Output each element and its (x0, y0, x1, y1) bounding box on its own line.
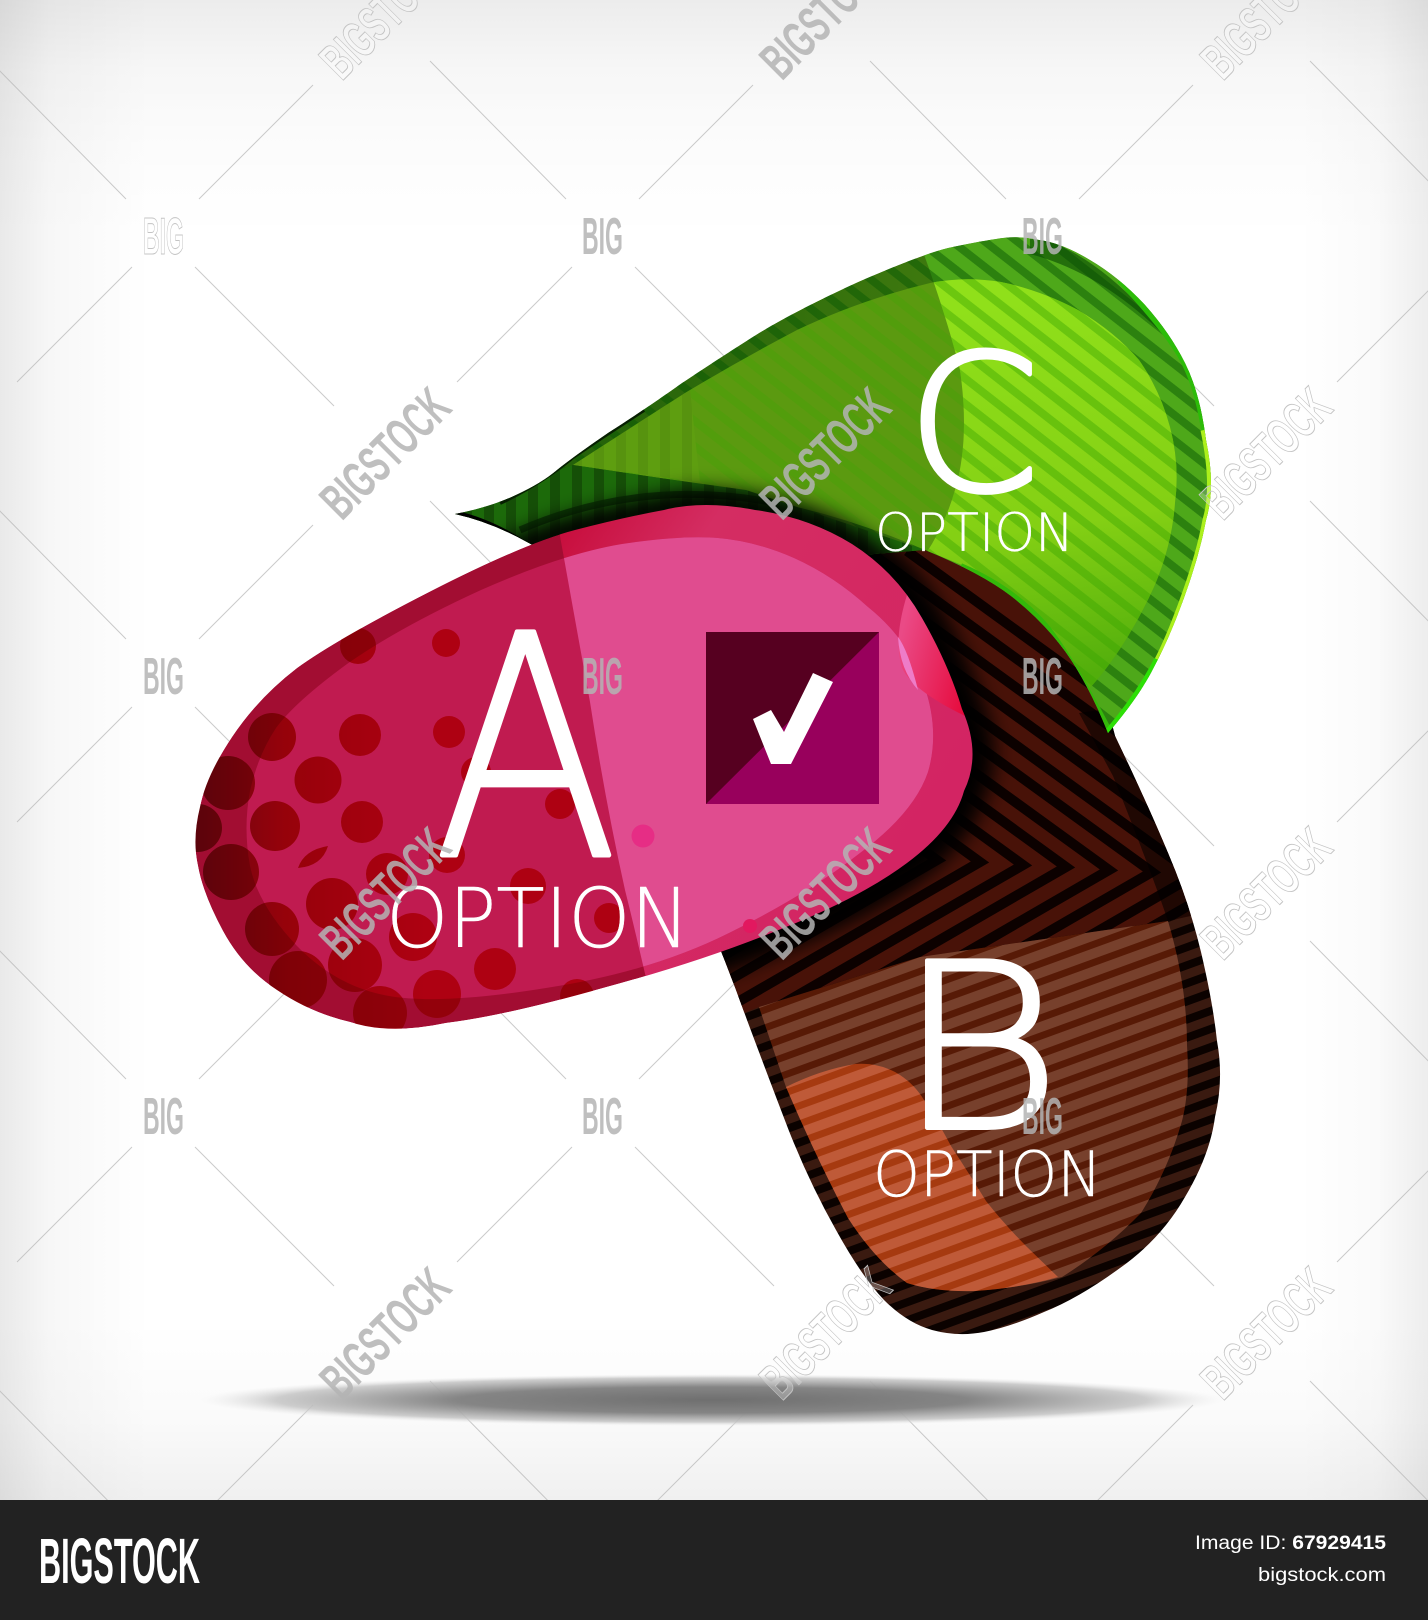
glossy highlight (898, 595, 965, 716)
watermarks: BIG (143, 648, 184, 706)
polka dots (174, 628, 624, 1040)
watermarks: BIG (582, 1088, 623, 1146)
cast shadow on green shape (501, 474, 904, 554)
panel: option A pink shape (195, 505, 972, 1029)
bright upper rim (1120, 280, 1206, 440)
lime rim (1158, 430, 1211, 660)
label: option C: OPTION (875, 503, 1074, 564)
watermarks: BIGSTOCK (749, 1257, 902, 1410)
watermarks: BIGSTOCK (749, 377, 902, 530)
footer bar: BIGSTOCK (39, 1525, 200, 1597)
dark right band of brown shape (1079, 710, 1191, 921)
vertical stripes at tail end (573, 390, 700, 482)
tail dark zone (455, 465, 922, 554)
icon: check box (706, 632, 879, 804)
letter B: B (896, 916, 1062, 1183)
green tip rim (1108, 660, 1158, 733)
ground shadow (200, 1374, 1224, 1426)
lower brown zone (759, 921, 1188, 1291)
image id: Image ID: 67929415 (1195, 1533, 1386, 1554)
watermarks: BIG (1022, 208, 1063, 266)
panel: option C green shape (455, 237, 1211, 733)
panel: option B brown shape (721, 550, 1220, 1334)
letter A: A (434, 572, 618, 928)
watermarks (143, 0, 1343, 1410)
right outer green band (924, 237, 1211, 733)
light lime area (928, 279, 1177, 689)
label: option B: OPTION (873, 1138, 1102, 1211)
bright lower edge (960, 568, 1108, 733)
watermarks: BIG (1022, 648, 1063, 706)
letter C: C (907, 315, 1040, 535)
watermarks: BIGSTOCK (749, 817, 902, 970)
cast shadow on brown shape (721, 552, 1006, 982)
watermarks: BIGSTOCK (1190, 1257, 1343, 1410)
label: option A: OPTION (386, 872, 690, 967)
watermarks: BIG (582, 208, 623, 266)
icon: check mark (753, 673, 833, 764)
watermarks: BIGSTOCK (309, 377, 462, 530)
watermarks: BIG (582, 648, 623, 706)
watermarks: BIG (143, 1088, 184, 1146)
footer bar (0, 1500, 1428, 1620)
watermarks: BIGSTOCK (309, 817, 462, 970)
watermarks: BIG (1022, 1088, 1063, 1146)
watermarks: BIGSTOCK (1190, 377, 1343, 530)
pink accent dots (632, 824, 654, 848)
watermarks: BIGSTOCK (309, 1257, 462, 1410)
watermarks: BIGSTOCK (1190, 817, 1343, 970)
site url: bigstock.com (1258, 1565, 1386, 1586)
watermarks: BIG (143, 208, 184, 266)
orange highlight zone (786, 1064, 1058, 1291)
dark upper crescent (1030, 238, 1159, 330)
